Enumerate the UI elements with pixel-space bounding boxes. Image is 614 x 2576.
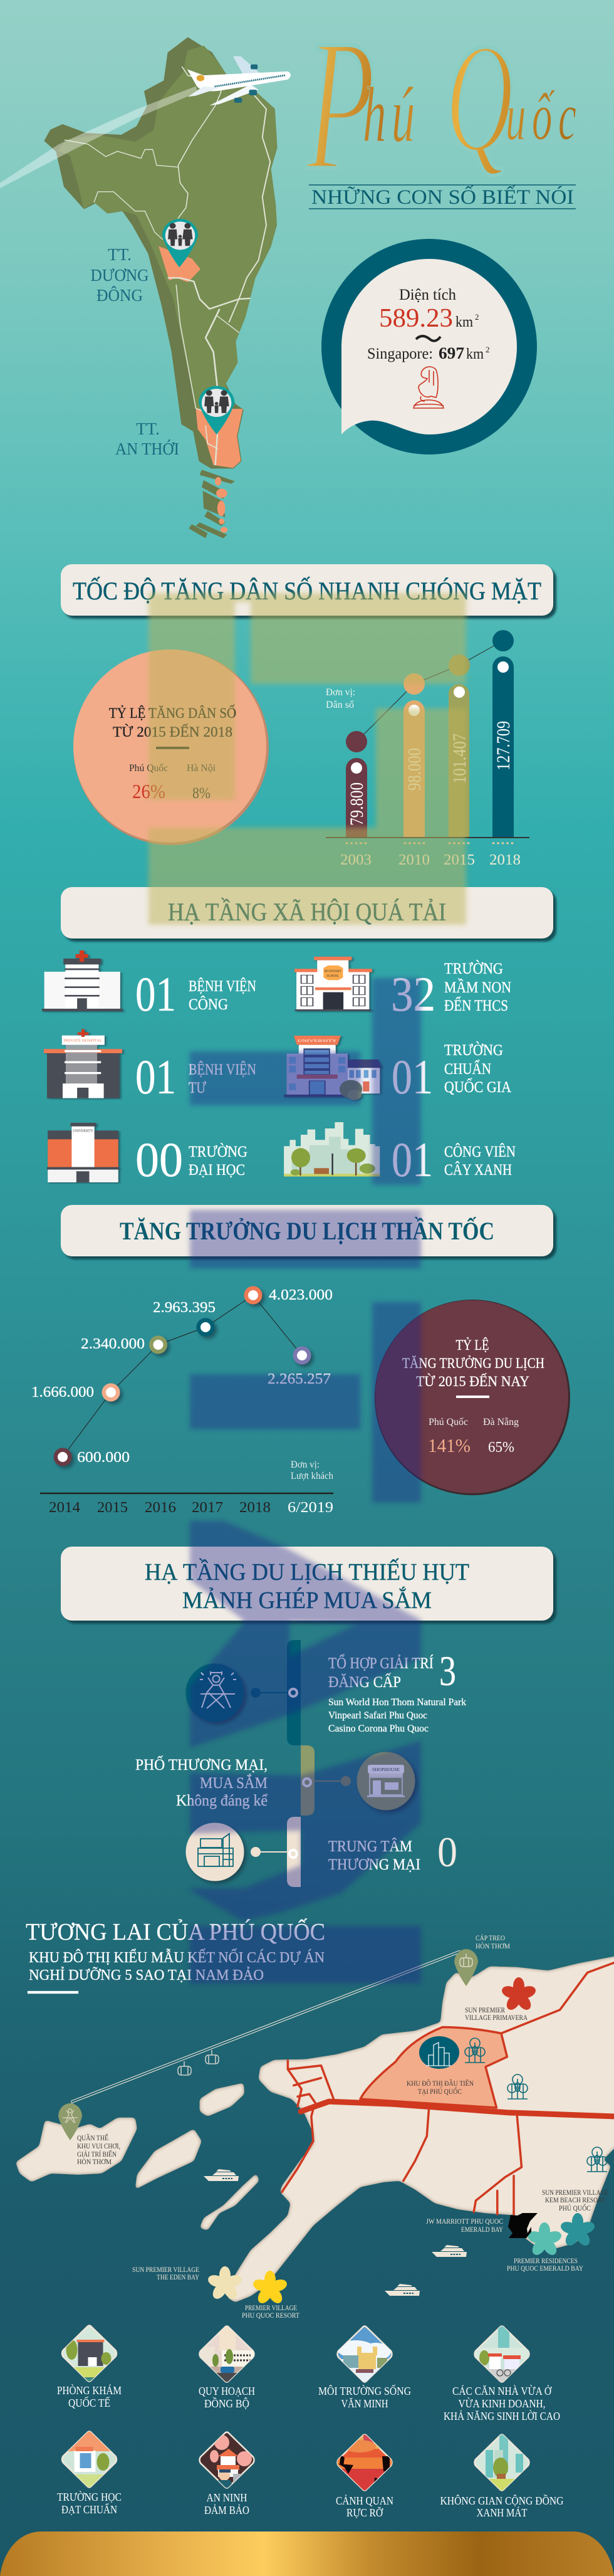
amenity: landscape: CẢNH QUAN xyxy=(336,2495,393,2507)
values: 600.000 xyxy=(77,1449,130,1466)
map: cable car xyxy=(58,1949,478,2140)
amenity: green community space: XANH MÁT xyxy=(476,2506,528,2519)
heading: future of Phu Quoc: TƯƠNG LAI CỦA PHÚ QUỐC xyxy=(26,1918,325,1945)
label: Premier Village: PREMIER VILLAGE xyxy=(245,2305,297,2312)
panel: tourism growth rate circle: Đà Nẵng xyxy=(483,1417,519,1427)
stat: 01 private hospital: 01 xyxy=(135,1049,176,1104)
amenity: security: AN NINH xyxy=(207,2491,247,2504)
icon: griffin JW Marriott xyxy=(508,2213,538,2238)
panel: social infrastructure heading xyxy=(61,887,553,938)
amenity: security: ĐẢM BẢO xyxy=(204,2504,249,2516)
unit label xyxy=(326,687,355,710)
area text xyxy=(367,287,490,362)
icon: public hospital xyxy=(42,950,123,1011)
label: Premier Village xyxy=(242,2305,299,2320)
islet 1 xyxy=(200,2083,244,2116)
label: JW Marriott xyxy=(426,2218,504,2234)
panel: tourism growth rate circle: TỪ 2015 ĐẾN NAY xyxy=(416,1373,529,1389)
icon: private hospital: PRIVATE HOSPITAL xyxy=(64,1038,102,1043)
airplane xyxy=(187,56,291,105)
stat: 01 park: CÔNG VIÊN xyxy=(444,1143,516,1160)
flower: Premier Residences xyxy=(526,2222,563,2258)
islet 3 xyxy=(200,2174,259,2231)
stat: 01 national school: CHUẨN xyxy=(444,1059,491,1078)
stat: 01 public hospital: BỆNH VIỆN xyxy=(189,977,256,995)
amenity: security xyxy=(199,2432,254,2516)
label: JW Marriott: JW MARRIOTT PHU QUOC xyxy=(426,2218,503,2226)
highway xyxy=(301,2101,614,2116)
panel: population growth rate circle: 8% xyxy=(192,785,211,802)
stat: 00 universities: 00 xyxy=(135,1132,183,1187)
connector: entertainment xyxy=(251,1688,297,1698)
icon: mall circle xyxy=(185,1823,244,1881)
panel: tourism growth rate circle xyxy=(375,1300,570,1495)
map: Phu Quoc island xyxy=(0,38,291,539)
stat: 01 park: CÂY XANH xyxy=(444,1161,512,1179)
amenity: synchronized planning: QUY HOẠCH xyxy=(199,2385,255,2397)
area text: 697 xyxy=(439,344,464,362)
values xyxy=(31,1287,333,1466)
unit label: Đơn vị: xyxy=(291,1459,320,1470)
point centres xyxy=(58,1290,307,1462)
pin: cable car station xyxy=(454,1949,478,1986)
panel: tourism growth rate circle: 65% xyxy=(488,1439,514,1456)
bar 2015: 101.407 xyxy=(449,733,470,784)
icon: towers xyxy=(426,2042,451,2066)
label: TT. An Thới: TT. xyxy=(136,419,160,438)
label: Eden Bay: THE EDEN BAY xyxy=(157,2274,200,2281)
stat: 32 schools: ĐẾN THCS xyxy=(444,996,508,1014)
stat: 01 private hospital: TƯ xyxy=(189,1080,206,1096)
area text: Singapore: xyxy=(367,345,433,362)
stat: 01 private hospital xyxy=(135,1049,256,1104)
stat: 32 schools: 32 xyxy=(391,967,435,1021)
unit label: Dân số xyxy=(326,700,354,710)
label: Primavera: SUN PREMIER xyxy=(465,2007,505,2014)
panel: tourism growth rate circle: TĂNG TRƯỞNG DU LỊCH xyxy=(402,1355,544,1371)
icon: city park xyxy=(284,1122,380,1177)
icon: shophouse circle xyxy=(357,1752,415,1811)
pin: Duong Dong xyxy=(162,219,198,268)
panel: tourism infrastructure heading: HẠ TẦNG DU LỊCH THIẾU HỤT xyxy=(145,1559,469,1585)
amenity: standard school: TRƯỜNG HỌC xyxy=(57,2490,122,2503)
unit label: Đơn vị: xyxy=(326,687,355,698)
values: 2.963.395 xyxy=(153,1300,216,1316)
label: TT. Dương Đông: TT. xyxy=(108,245,132,264)
pin: Hon Thom park xyxy=(58,2103,82,2140)
map: first urban area and roads xyxy=(282,1963,614,2214)
label: cable car: CÁP TREO xyxy=(476,1933,505,1942)
chart: population bars xyxy=(326,630,529,868)
amenity: green community space xyxy=(440,2434,564,2519)
amenity: shophouses: VỪA KINH DOANH, xyxy=(459,2397,545,2410)
panel: population growth rate circle: TỪ 2015 ĐẾN 2018 xyxy=(113,723,232,740)
icon: shophouse circle: SHOPHOUSE xyxy=(372,1767,400,1772)
area text: Diện tích xyxy=(399,287,456,303)
cable xyxy=(71,1950,461,2105)
year labels: 2014 xyxy=(49,1500,80,1516)
island light land xyxy=(59,46,276,410)
island base xyxy=(45,38,276,468)
label: TT. An Thới: AN THỚI xyxy=(115,439,179,458)
unit label xyxy=(291,1459,333,1481)
panel: population heading xyxy=(61,564,553,616)
panel: tourism growth rate circle: TỶ LỆ xyxy=(456,1337,489,1353)
map: labels xyxy=(77,1933,608,2320)
text: shopping streets xyxy=(135,1755,268,1809)
pin: An Thoi xyxy=(199,386,234,434)
heading: future of Phu Quoc xyxy=(26,1918,325,1994)
year labels: 2015 xyxy=(444,852,475,868)
icon: secondary school: SECONDARY xyxy=(325,970,341,973)
label: Primavera xyxy=(465,2007,528,2022)
flight trail xyxy=(0,86,198,188)
label: cable car xyxy=(476,1933,510,1950)
stat: 01 national school: 01 xyxy=(392,1049,433,1104)
label: Eden Bay xyxy=(132,2266,200,2281)
stat: 32 schools: TRƯỜNG xyxy=(444,960,503,977)
year labels: 2018 xyxy=(489,852,521,868)
roads xyxy=(65,67,270,465)
amenity: landscape xyxy=(336,2434,393,2519)
panel: population growth rate circle: TỶ LỆ TĂNG DÂN SỐ xyxy=(109,705,236,721)
icon: private hospital xyxy=(44,1029,122,1098)
label: Hon Thom park xyxy=(77,2133,120,2166)
icon: merlion xyxy=(414,367,444,408)
data points xyxy=(54,1286,311,1466)
stat: 32 schools xyxy=(391,960,511,1021)
text: malls: TRUNG TÂM xyxy=(328,1837,412,1855)
icons: boats xyxy=(204,2169,467,2296)
stat: 01 public hospital xyxy=(135,967,256,1021)
title: Phú Quốc: hú xyxy=(363,72,420,159)
label: JW Marriott: EMERALD BAY xyxy=(461,2226,504,2234)
panel: population growth rate circle xyxy=(73,649,269,845)
stat: 32 schools: MẦM NON xyxy=(444,978,511,996)
label: cable car: HÒN THƠM xyxy=(476,1942,510,1950)
watermark: gold shape xyxy=(148,593,466,925)
trend line xyxy=(356,641,503,742)
area text: km xyxy=(455,314,473,330)
chart: tourist arrivals line xyxy=(31,1286,333,1516)
tilde xyxy=(416,336,440,341)
icon: tree group 2 xyxy=(507,2074,528,2099)
icon: tree group 1 xyxy=(465,2038,485,2063)
stat: 00 universities xyxy=(135,1132,247,1187)
label: first urban area: TẠI PHÚ QUỐC xyxy=(418,2086,462,2096)
axis xyxy=(326,837,529,838)
year labels xyxy=(49,1500,333,1516)
text: entertainment complexes xyxy=(328,1647,466,1734)
watermark: blue shape xyxy=(190,978,421,1984)
axis xyxy=(40,1493,333,1494)
segment: entertainment xyxy=(287,1640,301,1745)
panel: amenities xyxy=(57,2326,564,2519)
label: Hon Thom park: HÒN THƠM xyxy=(77,2157,112,2166)
text: shopping streets: Không đáng kể xyxy=(176,1792,268,1809)
text: entertainment complexes: ĐĂNG CẤP xyxy=(328,1673,401,1691)
text: entertainment complexes: Vinpearl Safari Phu Quoc xyxy=(328,1710,427,1721)
label: Eden Bay: SUN PREMIER VILLAGE xyxy=(132,2266,199,2274)
area callout xyxy=(321,239,537,455)
values: 4.023.000 xyxy=(269,1287,333,1303)
connector: mall xyxy=(251,1847,297,1858)
year labels: 2018 xyxy=(239,1500,271,1516)
island: Hon Thom xyxy=(16,2118,137,2182)
amenity: international clinic: QUỐC TẾ xyxy=(68,2396,110,2409)
amenity: green community space: KHÔNG GIAN CỘNG ĐỒNG xyxy=(440,2494,564,2507)
panel: tourism growth rate circle: 141% xyxy=(428,1434,471,1456)
label: Premier Residences xyxy=(507,2258,584,2273)
area text: 2 xyxy=(486,345,490,354)
year labels xyxy=(340,852,521,868)
text: malls xyxy=(328,1828,457,1876)
title: Phú Quốc: Q xyxy=(445,11,513,185)
region: An Thoi xyxy=(195,409,243,468)
panel: tourism growth rate circle: Phú Quốc xyxy=(429,1417,468,1427)
panel: tourism growth heading xyxy=(61,1205,553,1256)
panel: tourism infrastructure timeline xyxy=(135,1640,466,1887)
stat: 00 universities: TRƯỜNG xyxy=(189,1143,247,1160)
stat: 01 national school xyxy=(392,1041,511,1104)
amenity: standard school: ĐẠT CHUẨN xyxy=(61,2503,117,2516)
area bubble xyxy=(341,259,517,434)
panel: population heading: TỐC ĐỘ TĂNG DÂN SỐ NHANH CHÓNG MẶT xyxy=(73,577,541,605)
values: 2.340.000 xyxy=(81,1336,145,1352)
stat: 00 universities: ĐẠI HỌC xyxy=(189,1162,245,1179)
axis dots xyxy=(346,843,514,844)
bar 2015 xyxy=(449,655,470,838)
icon: tree group 3 xyxy=(587,2147,607,2172)
urban area xyxy=(360,2027,507,2108)
label: Primavera: VILLAGE PRIMAVERA xyxy=(465,2014,528,2022)
stat: 01 national school: QUỐC GIA xyxy=(444,1078,511,1096)
footer: gold band xyxy=(0,2531,614,2576)
line xyxy=(63,1295,302,1457)
label: TT. Dương Đông: ĐÔNG xyxy=(96,286,143,305)
amenity: civilized living environment: MÔI TRƯỜNG SỐNG xyxy=(318,2384,411,2397)
panel: population growth rate circle: Phú Quốc xyxy=(129,763,168,774)
amenity: international clinic: PHÒNG KHÁM xyxy=(57,2384,122,2397)
stat: 01 public hospital: CÔNG xyxy=(189,996,228,1013)
bar 2003: 79.800 xyxy=(346,782,367,826)
icon: city badge xyxy=(419,2036,459,2069)
flower: Primavera xyxy=(501,1977,537,2012)
panel: tourism infrastructure heading: MẢNH GHÉP MUA SẮM xyxy=(182,1587,432,1614)
label: first urban area xyxy=(407,2078,474,2096)
panel: tourism growth heading: TĂNG TRƯỞNG DU LỊCH THẦN TỐC xyxy=(120,1216,494,1245)
map: urban area icons xyxy=(419,2036,607,2172)
heading: future of Phu Quoc: KHU ĐÔ THỊ KIỂU MẪU KẾT NỐI CÁC DỰ ÁN xyxy=(29,1949,325,1966)
panel: tourism infrastructure heading xyxy=(61,1547,553,1621)
values: 2.265.257 xyxy=(268,1371,331,1387)
icon: entertainment circle xyxy=(185,1664,244,1722)
label: first urban area: KHU ĐÔ THỊ ĐẦU TIÊN xyxy=(407,2078,474,2088)
label: TT. An Thới xyxy=(115,419,179,458)
text: shopping streets: MUA SẮM xyxy=(200,1774,268,1792)
amenity: standard school xyxy=(57,2431,122,2516)
amenity: synchronized planning: ĐỒNG BỘ xyxy=(204,2397,249,2410)
icon: secondary school: SCHOOL xyxy=(326,974,339,977)
region: Duong Dong xyxy=(159,246,200,282)
amenity: civilized living environment xyxy=(318,2326,411,2410)
amenity: landscape: RỰC RỠ xyxy=(346,2506,383,2519)
map: resort markers xyxy=(204,1977,596,2306)
label: TT. Dương Đông xyxy=(90,245,149,305)
text: entertainment complexes: Sun World Hon Thom Natural Park xyxy=(328,1697,466,1708)
subtitle: Những con số biết nói: NHỮNG CON SỐ BIẾT NÓI xyxy=(311,184,574,209)
gondolas xyxy=(178,2050,219,2075)
icon: university: UNIVERSITY xyxy=(73,1128,93,1133)
map: future of Phu Quoc land xyxy=(16,1953,614,2302)
icon: university xyxy=(47,1123,119,1182)
panel: population growth rate circle: 26% xyxy=(132,780,165,802)
label: Hon Thom park: GIẢI TRÍ BIỂN xyxy=(77,2149,117,2158)
label: Premier Village: PHU QUOC RESORT xyxy=(242,2312,299,2320)
icon: national standard school xyxy=(284,1036,382,1100)
bar 2018: 127.709 xyxy=(493,721,514,770)
bar 2003 xyxy=(346,731,367,838)
segment: shopping street xyxy=(301,1745,315,1816)
text: shopping streets: PHỐ THƯƠNG MẠI, xyxy=(135,1755,268,1774)
amenity: shophouses: CÁC CĂN NHÀ VỪA Ở xyxy=(452,2384,552,2397)
stat: 01 park xyxy=(392,1132,516,1187)
label: Hon Thom park: KHU VUI CHƠI, xyxy=(77,2143,120,2150)
stat: 01 national school: TRƯỜNG xyxy=(444,1041,503,1059)
text: malls: THƯƠNG MẠI xyxy=(328,1856,420,1873)
amenity: shophouses: KHẢ NĂNG SINH LỜI CAO xyxy=(444,2409,560,2422)
islet orange spots xyxy=(215,477,227,533)
area text: 2 xyxy=(475,312,479,322)
segment: mall xyxy=(287,1817,301,1887)
text: malls: 0 xyxy=(437,1828,457,1876)
stat: 01 public hospital: 01 xyxy=(135,967,176,1021)
amenity: international clinic xyxy=(57,2326,122,2409)
title: Phú Quốc: P xyxy=(306,1,375,209)
amenity: civilized living environment: VĂN MINH xyxy=(341,2397,388,2410)
area text: km xyxy=(466,346,484,362)
bar 2010 xyxy=(403,673,425,838)
amenity: shophouses xyxy=(444,2326,560,2422)
islet 2 xyxy=(135,2129,202,2190)
area ring xyxy=(321,239,537,455)
bar 2010: 98.000 xyxy=(404,748,425,791)
stat: 01 private hospital: BỆNH VIỆN xyxy=(189,1061,256,1078)
heading: future of Phu Quoc: NGHỈ DƯỠNG 5 SAO TẠI NAM ĐẢO xyxy=(29,1967,264,1984)
label: Kem Beach xyxy=(542,2189,608,2212)
year labels: 6/2019 xyxy=(288,1500,333,1516)
text: entertainment complexes: 3 xyxy=(439,1647,456,1695)
label: TT. Dương Đông: DƯƠNG xyxy=(90,266,149,285)
year labels: 2003 xyxy=(340,852,372,868)
flower: Eden Bay xyxy=(207,2266,243,2301)
label: Kem Beach: PHÚ QUỐC xyxy=(559,2203,591,2212)
flower: Kem Beach xyxy=(559,2213,596,2248)
label: Premier Residences: PREMIER RESIDENCES xyxy=(514,2258,578,2265)
panel: social infrastructure heading: HẠ TẦNG XÃ HỘI QUÁ TẢI xyxy=(168,898,446,926)
text: entertainment complexes: TỔ HỢP GIẢI TRÍ xyxy=(328,1654,434,1672)
panel: infrastructure stats xyxy=(42,950,516,1187)
year labels: 2010 xyxy=(398,852,430,868)
year labels: 2017 xyxy=(192,1500,223,1516)
stat: 01 park: 01 xyxy=(392,1132,433,1187)
icon: national standard school: UNIVERSITY xyxy=(298,1039,337,1043)
panel: population growth rate circle: Hà Nội xyxy=(187,763,216,774)
amenity: synchronized planning xyxy=(199,2326,255,2410)
title: Phú Quốc: uốc xyxy=(506,80,582,154)
year labels: 2016 xyxy=(145,1500,176,1516)
unit label: Lượt khách xyxy=(291,1471,333,1481)
connector: shophouse xyxy=(303,1776,351,1786)
label: Premier Residences: PHU QUOC EMERALD BAY xyxy=(507,2265,584,2273)
icon: secondary school xyxy=(294,957,372,1011)
values: 1.666.000 xyxy=(31,1384,94,1401)
text: entertainment complexes: Casino Corona Phu Quoc xyxy=(328,1723,429,1734)
mainland xyxy=(227,1953,614,2302)
southern islets xyxy=(189,470,235,539)
flower: Premier Village xyxy=(252,2271,288,2306)
bar 2018 xyxy=(492,630,514,838)
road network xyxy=(282,1963,614,2214)
label: Hon Thom park: QUẦN THỂ xyxy=(77,2133,108,2142)
area text: 589.23 xyxy=(379,304,453,333)
year labels: 2015 xyxy=(97,1500,128,1516)
